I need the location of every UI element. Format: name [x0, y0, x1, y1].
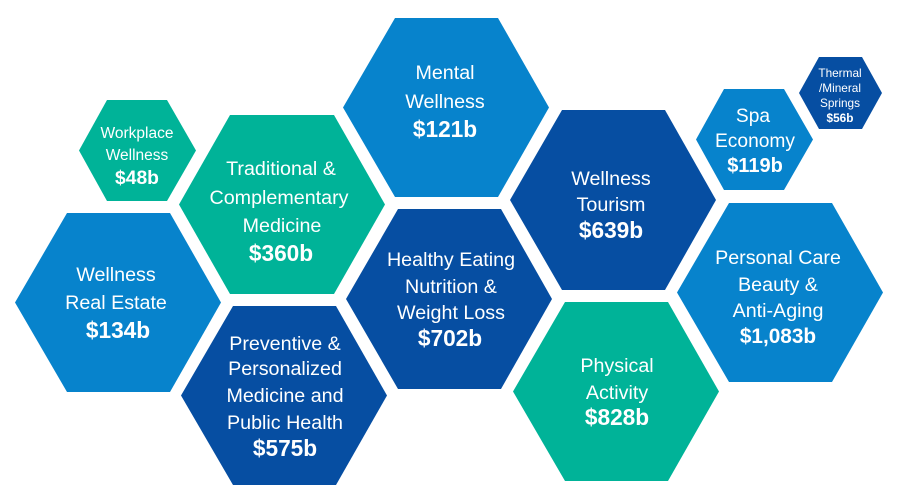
hexagon: Thermal/Mineral Springs: $56b	[827, 111, 853, 125]
hexagon: Healthy Eating Nutrition and Weight Loss: Healthy Eating	[387, 249, 515, 271]
hexagon: Personal Care Beauty and Anti-Aging: Beauty &	[738, 274, 818, 296]
hexagon: Spa Economy: Economy	[715, 131, 795, 152]
hexagon: Physical Activity: Physical	[580, 355, 654, 377]
hexagon: Physical Activity: $828b	[585, 404, 649, 430]
hexagon: Personal Care Beauty and Anti-Aging	[677, 203, 883, 382]
hexagon: Traditional and Complementary Medicine: Traditional &	[226, 158, 336, 180]
hexagon: Physical Activity	[513, 302, 719, 481]
hexagon: Traditional and Complementary Medicine: Medicine	[243, 215, 321, 237]
hexagon: Workplace Wellness	[79, 100, 196, 201]
hexagon: Thermal/Mineral Springs: Springs	[820, 96, 860, 110]
hexagon: Wellness Real Estate: Wellness	[76, 264, 156, 286]
hexagon: Preventive and Personalized Medicine and Public Health: Medicine and	[226, 385, 344, 407]
hexagon: Healthy Eating Nutrition and Weight Loss: Nutrition &	[405, 276, 497, 298]
hexagon: Thermal/Mineral Springs: /Mineral	[819, 81, 861, 95]
hexagon: Personal Care Beauty and Anti-Aging: $1,083b	[740, 325, 816, 348]
hexagon: Wellness Real Estate	[15, 213, 221, 392]
hexagon: Preventive and Personalized Medicine and Public Health: Personalized	[228, 358, 342, 380]
hexagon: Healthy Eating Nutrition and Weight Loss: $702b	[418, 325, 482, 351]
hexagon: Healthy Eating Nutrition and Weight Loss: Weight Loss	[397, 302, 505, 324]
hexagon: Mental Wellness: $121b	[413, 116, 477, 142]
hexagon: Workplace Wellness: $48b	[115, 168, 159, 189]
hexagon: Mental Wellness: Wellness	[405, 91, 485, 113]
hexagon: Traditional and Complementary Medicine: $360b	[249, 240, 313, 266]
hexagon: Spa Economy: Spa	[736, 106, 770, 127]
hexagon: Wellness Tourism: Wellness	[571, 168, 651, 190]
hexagon: Thermal/Mineral Springs	[799, 57, 882, 129]
hexagon: Workplace Wellness: Workplace	[101, 125, 173, 142]
hexagon: Wellness Real Estate: Real Estate	[65, 292, 167, 314]
hexagon: Wellness Tourism: Tourism	[577, 194, 645, 216]
hexagon: Workplace Wellness: Wellness	[106, 147, 169, 164]
hexagon: Wellness Tourism: $639b	[579, 217, 643, 243]
hexagon: Healthy Eating Nutrition and Weight Loss	[346, 209, 552, 389]
hexagon: Preventive and Personalized Medicine and Public Health	[181, 306, 387, 485]
hexagon: Mental Wellness	[343, 18, 549, 197]
hexagon: Mental Wellness: Mental	[415, 62, 475, 84]
hexagon: Wellness Real Estate: $134b	[86, 317, 150, 343]
hexagon: Wellness Tourism	[510, 110, 716, 290]
hexagon: Traditional and Complementary Medicine	[179, 115, 385, 294]
hexagon: Traditional and Complementary Medicine: Complementary	[210, 187, 349, 209]
hexagon: Preventive and Personalized Medicine and Public Health: Preventive &	[229, 333, 341, 355]
hexagon: Personal Care Beauty and Anti-Aging: Anti-Aging	[733, 300, 823, 322]
hexagon: Preventive and Personalized Medicine and Public Health: Public Health	[227, 412, 343, 434]
hexagon: Spa Economy	[696, 89, 813, 190]
hexagon: Preventive and Personalized Medicine and Public Health: $575b	[253, 435, 317, 461]
hexagon: Spa Economy: $119b	[727, 155, 783, 177]
hexagon: Thermal/Mineral Springs: Thermal	[818, 66, 862, 80]
hexagon: Personal Care Beauty and Anti-Aging: Personal Care	[715, 247, 841, 269]
hexagon: Physical Activity: Activity	[586, 382, 648, 404]
